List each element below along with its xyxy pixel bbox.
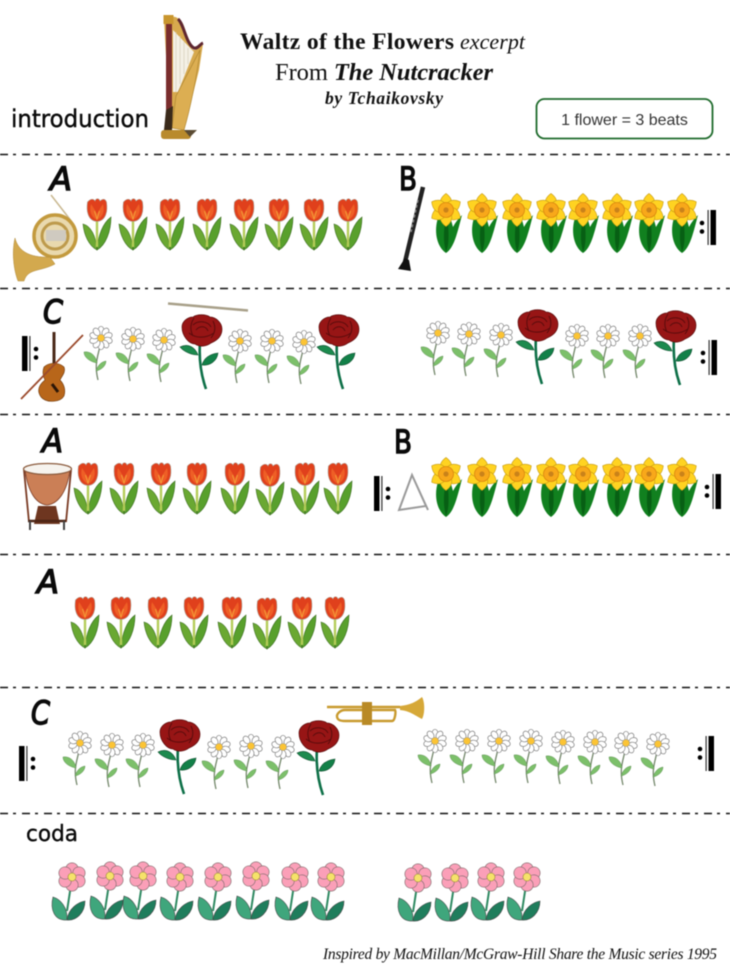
tulips: [71, 597, 349, 649]
end repeat sign: [698, 736, 714, 771]
credit line: Inspired by MacMillan/McGraw-Hill Share the Music series 1995: [322, 946, 717, 963]
daisies and roses: [84, 315, 359, 389]
icon: trumpet: [327, 697, 424, 725]
icon: clarinet: [398, 187, 423, 271]
panel: row 2 C: [21, 293, 717, 401]
pink flowers, second group: [398, 863, 542, 921]
panel: row 1 A and B: [13, 160, 716, 281]
end repeat sign: [700, 210, 716, 245]
icon: violin and bow: [21, 332, 83, 401]
icon: triangle: [399, 475, 428, 510]
icon: harp: [161, 15, 203, 139]
daffodils: [429, 458, 699, 517]
start repeat sign: [19, 746, 35, 781]
section letter A: A: [48, 160, 72, 198]
icon: timpani: [24, 464, 72, 530]
tulips: [83, 199, 362, 250]
composer: by Tchaikovsky: [325, 88, 443, 108]
section letter A: A: [35, 563, 59, 601]
daisies and roses: [63, 720, 339, 795]
title suffix: excerpt: excerpt: [460, 29, 526, 54]
daisies: [418, 729, 670, 786]
section letter C: C: [43, 293, 64, 331]
daisies and roses, repeat: [421, 310, 696, 385]
start repeat sign: [22, 336, 38, 371]
heading: coda: coda: [26, 822, 78, 847]
tulips: [74, 463, 352, 515]
heading: introduction: introduction: [11, 105, 149, 133]
panel: header: [11, 15, 712, 139]
panel: coda: [26, 822, 542, 921]
icon: French horn: [13, 195, 76, 281]
section letter B: B: [394, 423, 412, 461]
daffodils: [429, 194, 699, 253]
section letter C: C: [31, 694, 51, 732]
callout: beat key: [536, 99, 712, 138]
subtitle: From The Nutcracker: [275, 59, 493, 86]
icon: flute: [168, 304, 248, 310]
title: Waltz of the Flowers: [240, 29, 454, 55]
end repeat sign: [705, 474, 721, 509]
section letter B: B: [399, 160, 417, 198]
panel: row 5 C: [19, 694, 714, 795]
panel: row 3 A and B: [24, 422, 721, 530]
pink flowers: [52, 862, 346, 920]
end repeat sign: [701, 340, 717, 375]
section letter A: A: [40, 422, 63, 460]
panel: row 4 A: [35, 563, 349, 649]
start repeat sign: [374, 476, 390, 511]
callout: beat key: 1 flower = 3 beats: [561, 112, 688, 129]
